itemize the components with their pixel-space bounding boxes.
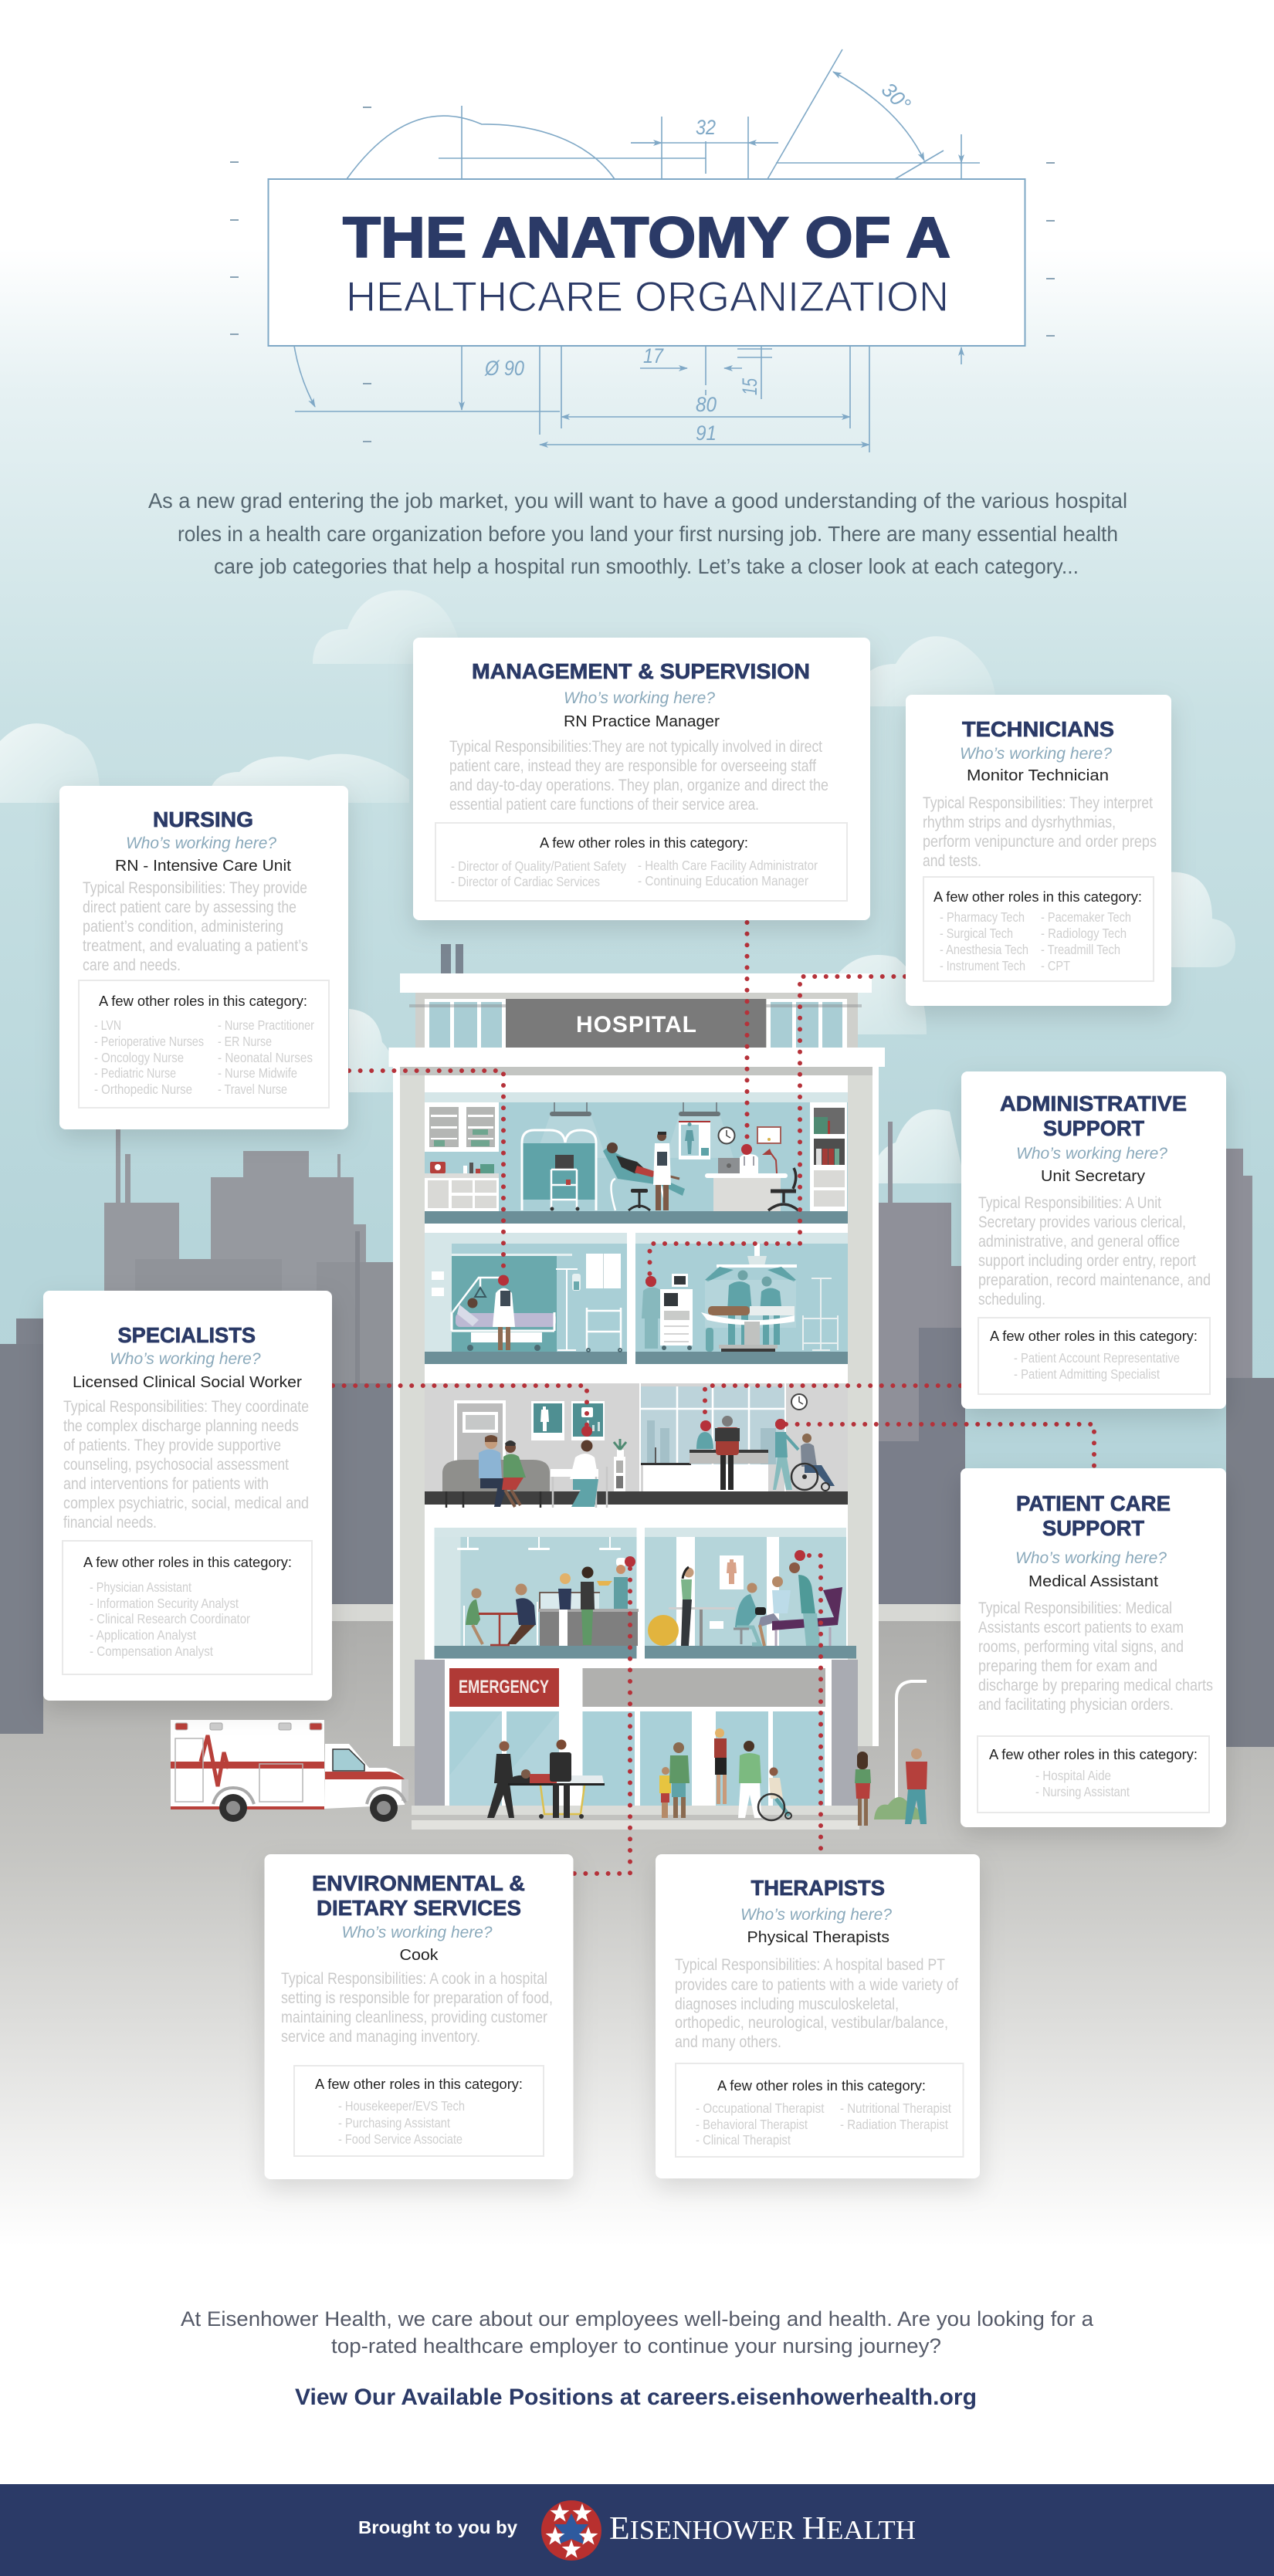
responsibilities: [978, 1599, 1213, 1714]
heading: [1000, 1092, 1187, 1140]
pedestrians and street lamp: [855, 1681, 927, 1826]
hospital sign: HOSPITAL: [576, 1012, 696, 1038]
other roles box: - Information Security Analyst: [90, 1596, 239, 1611]
man in line: [581, 1567, 595, 1645]
title blueprint drawing: 32: [696, 116, 716, 139]
responsibilities: [281, 1969, 553, 2046]
responsibilities: Typical Responsibilities: They coordinate: [63, 1397, 309, 1416]
role: Physical Therapists: [747, 1929, 889, 1946]
other roles box: - Occupational Therapist: [696, 2100, 825, 2116]
responsibilities: support including order entry, report: [978, 1251, 1196, 1270]
responsibilities: and day-to-day operations. They plan, organize and direct the: [449, 776, 828, 794]
other roles box: - Instrument Tech: [940, 958, 1025, 973]
title line 1: THE ANATOMY OF A: [343, 205, 950, 269]
counter with drawers: [425, 1162, 499, 1211]
other roles box: - Orthopedic Nurse: [94, 1082, 192, 1097]
other roles box: - LVN: [94, 1017, 121, 1033]
other roles box: - Clinical Research Coordinator: [90, 1611, 250, 1627]
other roles box: - Application Analyst: [90, 1627, 196, 1643]
other roles box: A few other roles in this category:: [989, 1746, 1198, 1762]
responsibilities: maintaining cleanliness, providing customer: [281, 2008, 547, 2026]
other roles box: - Compensation Analyst: [90, 1643, 213, 1659]
man pushing wheelchair: [738, 1741, 791, 1820]
responsibilities: counseling, psychosocial assessment: [63, 1455, 289, 1474]
other roles box: - Pharmacy Tech: [940, 909, 1025, 925]
responsibilities: and many others.: [675, 2033, 781, 2051]
other roles box: - Nurse Midwife: [218, 1065, 297, 1081]
intro text: care job categories that help a hospital run smoothly. Let’s take a closer look at each category...: [214, 554, 1079, 578]
subheading: Who’s working here?: [564, 689, 715, 707]
woman walking: [681, 1567, 693, 1646]
title blueprint drawing: 17: [643, 344, 664, 367]
role: Monitor Technician: [967, 767, 1109, 784]
other roles box: - Director of Quality/Patient Safety: [451, 858, 626, 874]
floor 1: clinic: [425, 1092, 848, 1224]
responsibilities: [83, 878, 308, 974]
other roles box: A few other roles in this category:: [717, 2077, 926, 2094]
clouds: [0, 591, 1235, 1183]
responsibilities: perform venipuncture and order preps: [923, 832, 1157, 851]
title box: [269, 179, 1025, 346]
medicine cabinet: [425, 1102, 499, 1152]
girl at table: [464, 1589, 483, 1646]
serving counter: [538, 1593, 639, 1646]
city skyline: right: [879, 1122, 1274, 1747]
side table and plant: [614, 1439, 626, 1491]
responsibilities: the complex discharge planning needs: [63, 1417, 299, 1435]
other roles box: - Director of Cardiac Services: [451, 874, 600, 889]
responsibilities: service and managing inventory.: [281, 2027, 480, 2046]
standing doctor: [653, 1132, 671, 1210]
heading: [1016, 1491, 1171, 1540]
iv pole and trolley: [803, 1278, 838, 1350]
other roles box: - Food Service Associate: [338, 2131, 463, 2147]
role: Cook: [400, 1947, 439, 1964]
supply cart: [587, 1308, 622, 1352]
certificate: [757, 1127, 781, 1143]
table: [479, 1613, 522, 1645]
surgical lights: [705, 1244, 797, 1328]
floor 2: patient room: [425, 1233, 627, 1364]
panel: technicians: [906, 695, 1171, 1006]
floor 4: cafeteria: [434, 1528, 639, 1658]
other roles box: [435, 823, 847, 901]
responsibilities: orthopedic, neurological, vestibular/balance,: [675, 2013, 948, 2032]
standing therapist: [789, 1562, 820, 1646]
panel: specialists: [43, 1291, 332, 1701]
heading: MANAGEMENT & SUPERVISION: [472, 659, 810, 683]
subheading: Who’s working here?: [740, 1906, 892, 1924]
responsibilities: [923, 794, 1157, 870]
other roles box: A few other roles in this category:: [83, 1554, 292, 1570]
other roles box: [294, 2066, 544, 2156]
responsibilities: rooms, performing vital signs, and: [978, 1637, 1184, 1656]
responsibilities: treatment, and evaluating a patient’s: [83, 936, 308, 955]
heading: DIETARY SERVICES: [317, 1896, 521, 1920]
heading: SUPPORT: [1042, 1516, 1144, 1540]
heading: TECHNICIANS: [962, 717, 1114, 741]
responsibilities: [63, 1397, 309, 1532]
other roles box: [923, 877, 1154, 981]
title line 2: HEALTHCARE ORGANIZATION: [346, 272, 949, 320]
therapist and patient: [734, 1576, 791, 1646]
anatomy poster: [679, 1121, 710, 1159]
heading: PATIENT CARE: [1016, 1491, 1171, 1515]
roof floor: [415, 993, 858, 1048]
responsibilities: Typical Responsibilities: Medical: [978, 1599, 1172, 1617]
responsibilities: of patients. They provide supportive: [63, 1436, 281, 1454]
other roles box: - Surgical Tech: [940, 926, 1013, 941]
sofa: [442, 1460, 550, 1508]
responsibilities: Typical Responsibilities: A hospital based PT: [675, 1955, 945, 1974]
call to action: View Our Available Positions at careers.eisenhowerhealth.org: [295, 2385, 977, 2410]
anatomy posters: [531, 1401, 605, 1440]
oxygen tank: [706, 1328, 713, 1352]
other roles box: - Housekeeper/EVS Tech: [338, 2098, 465, 2114]
brought to you by: Brought to you by: [358, 2517, 517, 2537]
intro text: [148, 489, 1127, 578]
other roles box: A few other roles in this category:: [315, 2076, 523, 2092]
panel: therapists: [656, 1854, 980, 2178]
responsibilities: rhythm strips and dysrhythmias,: [923, 813, 1116, 831]
other roles box: - Hospital Aide: [1035, 1768, 1111, 1783]
reception counter: [641, 1447, 768, 1491]
desk and doctor: [705, 1149, 788, 1211]
intro text: As a new grad entering the job market, you will want to have a good understanding of the various hospital: [148, 489, 1127, 513]
role: RN Practice Manager: [564, 713, 720, 730]
cook: [597, 1558, 628, 1609]
responsibilities: [978, 1193, 1211, 1308]
heading: SUPPORT: [1043, 1116, 1144, 1140]
hospital building: [0, 638, 1274, 2576]
title blueprint drawing: [230, 49, 1055, 452]
responsibilities: [675, 1955, 958, 2051]
technician at monitor: [642, 1276, 664, 1349]
panel: patient care support: [961, 1468, 1226, 1827]
heading: NURSING: [153, 807, 253, 831]
shelving: [810, 1102, 847, 1211]
subheading: Who’s working here?: [1015, 1549, 1167, 1567]
ambulance: [171, 1720, 408, 1822]
responsibilities: administrative, and general office: [978, 1232, 1180, 1251]
responsibilities: financial needs.: [63, 1513, 157, 1532]
other roles box: A few other roles in this category:: [540, 834, 748, 851]
panel: management and supervision: [413, 638, 870, 920]
footer band: [0, 2484, 1274, 2576]
other roles box: [676, 2063, 964, 2157]
other roles box: - Radiation Therapist: [840, 2117, 948, 2132]
heading: ADMINISTRATIVE: [1000, 1092, 1187, 1115]
subheading: Who’s working here?: [126, 834, 276, 852]
ground: [0, 1621, 1274, 2246]
other roles box: - Radiology Tech: [1041, 926, 1127, 941]
responsibilities: patient care, instead they are responsible for overseeing staff: [449, 757, 816, 775]
hospital bed with patient: [452, 1278, 556, 1351]
connector: therapists: [795, 1550, 821, 1854]
ceiling lamps: [535, 1102, 734, 1158]
subheading: Who’s working here?: [110, 1350, 261, 1368]
logo wordmark: EISENHOWER HEALTH: [609, 2511, 916, 2547]
city skyline: left: [16, 1129, 393, 1388]
other roles box: - Behavioral Therapist: [696, 2117, 808, 2132]
office chair: [768, 1168, 798, 1210]
responsibilities: Assistants escort patients to exam: [978, 1618, 1184, 1637]
responsibilities: preparation, record maintenance, and: [978, 1271, 1211, 1289]
family in lobby: [659, 1728, 727, 1818]
responsibilities: [449, 737, 828, 814]
exercise ball: [648, 1615, 679, 1646]
other roles box: - Continuing Education Manager: [638, 873, 808, 889]
other roles box: A few other roles in this category:: [933, 889, 1142, 905]
responsibilities: preparing them for exam and: [978, 1657, 1157, 1675]
parallel bars: [669, 1607, 735, 1646]
responsibilities: Typical Responsibilities:They are not typically involved in direct: [449, 737, 822, 756]
subheading: Who’s working here?: [341, 1924, 493, 1941]
panel: environmental and dietary services: [264, 1854, 573, 2179]
other roles box: - Patient Account Representative: [1014, 1350, 1180, 1366]
closing text: At Eisenhower Health, we care about our employees well-being and health. Are you looking for a: [181, 2307, 1094, 2331]
other roles box: [978, 1736, 1209, 1813]
floor 2: operating room: [635, 1233, 848, 1364]
other roles box: - Neonatal Nurses: [218, 1050, 313, 1065]
heading: SPECIALISTS: [117, 1323, 256, 1347]
patient in exam chair: [603, 1142, 685, 1210]
other roles box: - Oncology Nurse: [94, 1050, 184, 1065]
curtain and cart: [522, 1130, 596, 1210]
ground floor: emergency entrance: [412, 1660, 859, 1830]
panel: administrative support: [961, 1071, 1226, 1409]
nurse at bedside: [493, 1288, 515, 1350]
connector: management: [741, 922, 752, 1155]
other roles box: - Purchasing Assistant: [338, 2115, 450, 2131]
connector: nursing: [349, 1071, 509, 1286]
wall outlets: [432, 1271, 444, 1296]
panel: nursing: [59, 786, 348, 1129]
other roles box: [79, 980, 329, 1108]
closing text: top-rated healthcare employer to continue your nursing journey?: [331, 2334, 941, 2358]
responsibilities: setting is responsible for preparation of food,: [281, 1989, 553, 2007]
connector: technicians: [645, 977, 905, 1287]
title blueprint drawing: Ø 90: [484, 357, 524, 380]
boy at table: [507, 1584, 537, 1645]
responsibilities: direct patient care by assessing the: [83, 898, 296, 916]
other roles box: - Physician Assistant: [90, 1579, 191, 1595]
role: Unit Secretary: [1041, 1168, 1145, 1185]
hospital sign: [506, 999, 766, 1048]
responsibilities: Typical Responsibilities: They provide: [83, 878, 307, 897]
other roles box: [63, 1541, 312, 1674]
other roles box: - Nutritional Therapist: [840, 2100, 951, 2116]
surgeons and operating table: [701, 1271, 795, 1352]
other roles box: - Pediatric Nurse: [94, 1065, 176, 1081]
other roles box: A few other roles in this category:: [990, 1328, 1198, 1344]
other roles box: - CPT: [1041, 958, 1070, 973]
door: [454, 1400, 506, 1491]
top windows: [409, 999, 862, 1048]
title blueprint drawing: 80: [696, 393, 717, 416]
subheading: Who’s working here?: [1016, 1145, 1167, 1163]
wall clock: [791, 1394, 807, 1410]
title blueprint drawing: 91: [696, 421, 717, 445]
connector: environmental: [574, 1556, 635, 1874]
iv pole: [556, 1269, 581, 1350]
connector: specialists: [333, 1386, 592, 1437]
heading: THERAPISTS: [751, 1876, 885, 1900]
other roles box: - ER Nurse: [218, 1034, 272, 1049]
subheading: Who’s working here?: [960, 745, 1112, 763]
other roles box: - Treadmill Tech: [1041, 942, 1120, 957]
responsibilities: provides care to patients with a wide variety of: [675, 1975, 958, 1994]
intro text: roles in a health care organization before you land your first nursing job. There are many essential health: [178, 522, 1118, 546]
nurse with wheelchair: [773, 1419, 835, 1491]
responsibilities: Typical Responsibilities: They interpret: [923, 794, 1153, 812]
heading: ENVIRONMENTAL &: [312, 1871, 525, 1895]
roof vents: [441, 944, 463, 973]
responsibilities: and interventions for patients with: [63, 1474, 269, 1493]
responsibilities: Typical Responsibilities: A cook in a hospital: [281, 1969, 547, 1988]
other roles box: A few other roles in this category:: [99, 993, 307, 1009]
responsibilities: Typical Responsibilities: A Unit: [978, 1193, 1161, 1212]
other roles box: - Pacemaker Tech: [1041, 909, 1131, 925]
responsibilities: and facilitating physician orders.: [978, 1695, 1174, 1714]
monitoring equipment: [660, 1274, 693, 1350]
title blueprint drawing: 30°: [877, 78, 915, 117]
role: Medical Assistant: [1028, 1573, 1158, 1590]
reception window: [639, 1383, 786, 1491]
wall clock: [718, 1127, 735, 1144]
main body: [393, 1067, 879, 1746]
anatomy chart: [720, 1555, 744, 1589]
paramedics and stretcher: [487, 1740, 605, 1819]
responsibilities: essential patient care functions of their service area.: [449, 795, 759, 814]
responsibilities: scheduling.: [978, 1290, 1045, 1308]
woman in line: [558, 1573, 571, 1646]
emergency sign: EMERGENCY: [459, 1677, 549, 1698]
other roles box: [978, 1318, 1210, 1394]
dark foreground buildings: [0, 1344, 393, 1734]
consult desk and doctor: [551, 1440, 607, 1508]
responsibilities: patient’s condition, administering: [83, 917, 283, 936]
responsibilities: Secretary provides various clerical,: [978, 1213, 1186, 1231]
floor 4: physical therapy: [645, 1528, 856, 1658]
closing text: [181, 2307, 1094, 2358]
glass entrance panels: [449, 1711, 825, 1806]
responsibilities: and tests.: [923, 851, 981, 870]
responsibilities: diagnoses including musculoskeletal,: [675, 1995, 899, 2013]
other roles box: - Travel Nurse: [218, 1082, 287, 1097]
floor 3: waiting area and reception: [425, 1383, 848, 1508]
title blueprint drawing: 15: [738, 377, 761, 395]
emergency sign: [449, 1668, 559, 1707]
heading: [312, 1871, 525, 1920]
other roles box: - Nurse Practitioner: [218, 1017, 314, 1033]
connector: patient care: [775, 1419, 1094, 1467]
background sky: [0, 0, 1274, 1775]
visitor at reception: [715, 1416, 740, 1490]
other roles box: - Perioperative Nurses: [94, 1034, 204, 1049]
responsibilities: care and needs.: [83, 956, 181, 974]
role: RN - Intensive Care Unit: [115, 858, 291, 875]
responsibilities: discharge by preparing medical charts: [978, 1676, 1213, 1694]
role: Licensed Clinical Social Worker: [73, 1374, 302, 1391]
other roles box: - Anesthesia Tech: [940, 942, 1028, 957]
other roles box: - Clinical Therapist: [696, 2132, 791, 2148]
other roles box: - Health Care Facility Administrator: [638, 858, 818, 873]
other roles box: - Patient Admitting Specialist: [1014, 1366, 1160, 1382]
receptionist: [696, 1420, 713, 1449]
connector: administrative: [700, 1386, 961, 1431]
responsibilities: complex psychiatric, social, medical and: [63, 1494, 309, 1512]
couple on sofa: [479, 1435, 526, 1507]
other roles box: - Nursing Assistant: [1035, 1784, 1130, 1799]
logo mark: [541, 2500, 601, 2561]
wall cabinet: [586, 1254, 621, 1288]
treatment table: [772, 1587, 842, 1646]
